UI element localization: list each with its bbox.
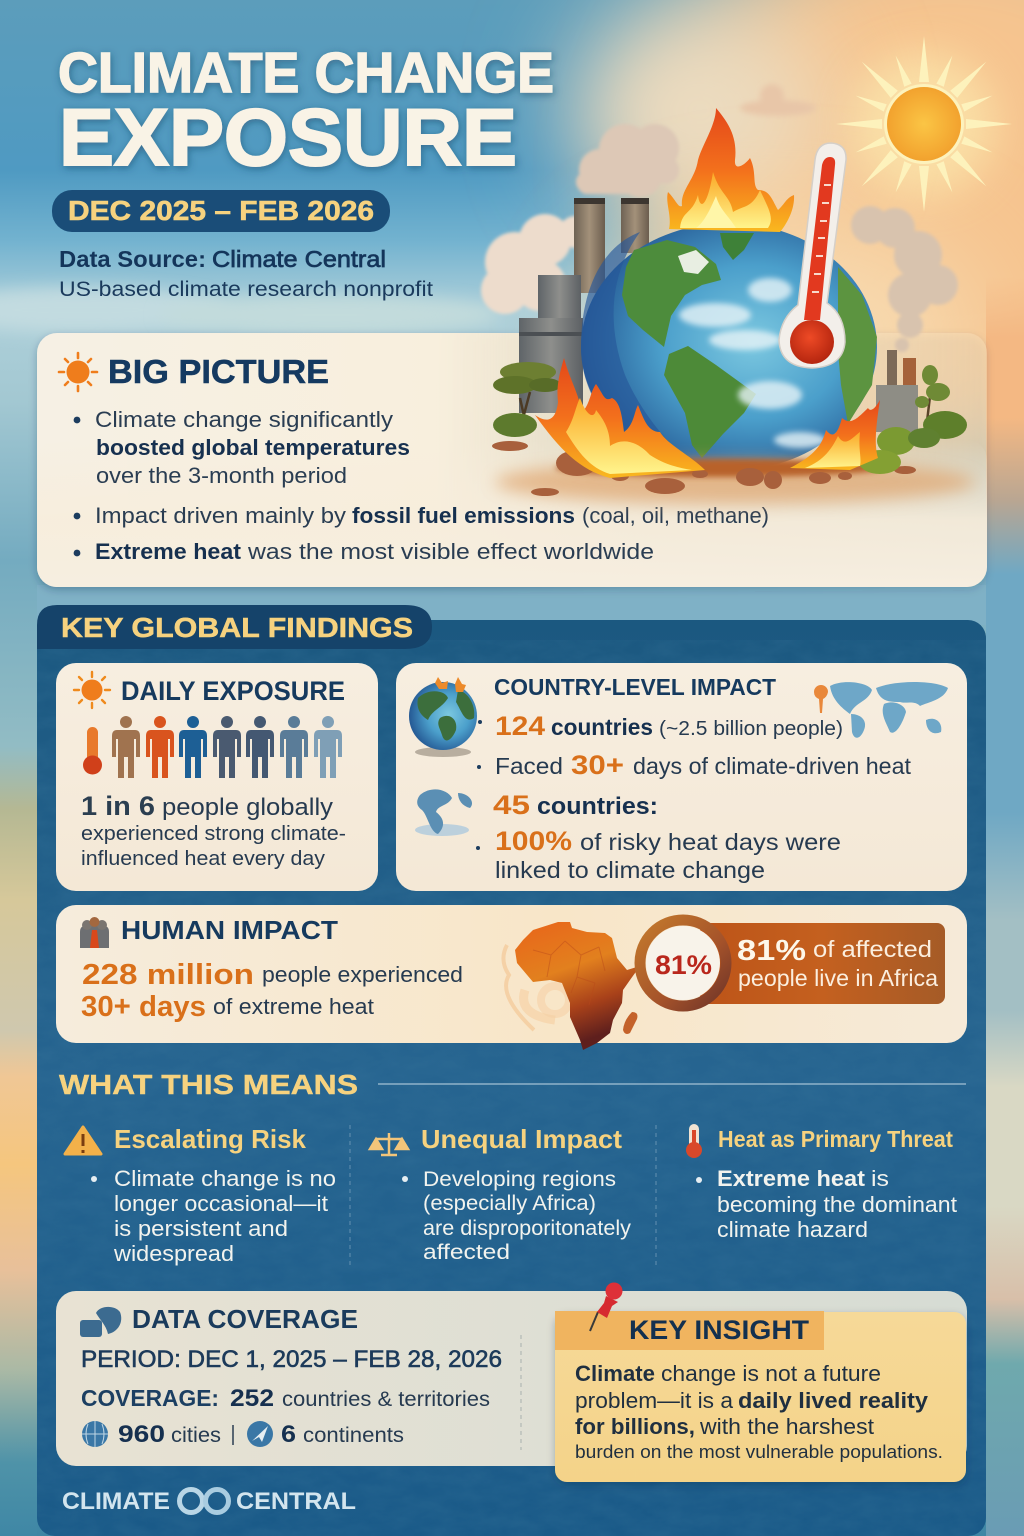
heading: WHAT THIS MEANS xyxy=(59,1069,358,1100)
column: unequal impact: are disproporitonately xyxy=(423,1216,631,1240)
column: escalating risk xyxy=(65,1124,336,1266)
distant cloud xyxy=(740,84,816,116)
column: heat as primary threat: becoming the dominant xyxy=(717,1192,957,1217)
section: what this means xyxy=(59,1069,966,1266)
insight text: change is not a future xyxy=(661,1361,881,1386)
stat: 30+ days: 30+ xyxy=(571,750,624,780)
stat: 124 countries: (~2.5 billion people) xyxy=(659,718,843,740)
callout: 81 percent: 81% xyxy=(737,935,806,967)
heading: DAILY EXPOSURE xyxy=(121,676,345,706)
callout: 81 percent xyxy=(640,920,945,1006)
cities and continents xyxy=(82,1421,404,1448)
heading: COUNTRY-LEVEL IMPACT xyxy=(494,674,776,700)
callout: 81 percent: of affected xyxy=(813,936,932,962)
cities and continents: 960 xyxy=(118,1421,165,1448)
stat: 228 million xyxy=(81,959,463,1023)
map: Africa xyxy=(515,922,640,1050)
column: heat as primary threat xyxy=(686,1124,957,1242)
column: unequal impact: Developing regions xyxy=(423,1167,616,1191)
stat text xyxy=(81,791,346,870)
title xyxy=(58,41,554,183)
stat: 45 countries xyxy=(493,790,658,820)
panel: big picture xyxy=(37,333,987,587)
stat: 30+ days xyxy=(477,750,912,780)
icon: globe and case xyxy=(80,1307,121,1337)
column: escalating risk: Escalating Risk xyxy=(114,1124,307,1154)
card: daily exposure xyxy=(56,663,378,891)
icon: sun xyxy=(59,353,97,391)
column: escalating risk: longer occasional—it xyxy=(114,1191,328,1216)
column: unequal impact xyxy=(370,1124,631,1264)
smoke clouds xyxy=(481,124,958,352)
cities and continents: cities xyxy=(171,1424,221,1447)
insight text: with the harshest xyxy=(699,1414,874,1439)
stat text: experienced strong climate- xyxy=(81,823,346,845)
big picture bullets: Climate change significantly xyxy=(95,407,394,432)
top flames xyxy=(667,108,794,232)
ground xyxy=(492,441,975,504)
stat: 45 countries: countries: xyxy=(537,793,658,820)
card: human impact xyxy=(56,905,967,1050)
heading: big picture: BIG PICTURE xyxy=(108,353,329,390)
stat: 228 million: 30+ days xyxy=(81,991,206,1023)
factory right xyxy=(876,350,918,432)
bottom fires xyxy=(535,358,880,478)
title: EXPOSURE xyxy=(59,93,517,183)
footer logo: CENTRAL xyxy=(236,1488,356,1515)
callout: 81 percent: people live in Africa xyxy=(738,965,938,991)
stat: 100 percent: 100% xyxy=(495,826,572,856)
insight text: problem—it is a xyxy=(575,1388,734,1413)
factory left xyxy=(519,198,649,413)
data source: Climate Central xyxy=(212,246,386,272)
heat swirl xyxy=(503,945,569,1030)
callout: key insight xyxy=(555,1282,966,1482)
insight text xyxy=(575,1361,943,1462)
icon: globe xyxy=(409,677,477,757)
Greenland xyxy=(720,233,754,260)
data source: US-based climate research nonprofit xyxy=(59,278,433,301)
icon: small world xyxy=(415,789,472,836)
icon: sun xyxy=(74,672,110,708)
icon: world map xyxy=(814,682,948,738)
insight text: Climate xyxy=(575,1361,655,1386)
column: unequal impact: affected xyxy=(423,1240,510,1264)
column: heat as primary threat: Extreme heat xyxy=(717,1166,866,1191)
panel: key global findings xyxy=(37,605,986,1536)
tab xyxy=(555,1311,824,1350)
big picture bullets: fossil fuel emissions xyxy=(352,503,575,528)
icon: crowd xyxy=(80,917,109,948)
column: unequal impact: (especially Africa) xyxy=(423,1191,596,1215)
thermometer xyxy=(779,143,846,368)
coverage xyxy=(81,1385,490,1412)
card: country-level impact xyxy=(396,663,967,891)
column: heat as primary threat: Heat as Primary Threat xyxy=(718,1126,953,1152)
big picture bullets: Impact driven mainly by xyxy=(95,503,347,528)
people row xyxy=(112,716,342,778)
stat text: people globally xyxy=(162,794,333,821)
big picture bullets: (coal, oil, methane) xyxy=(582,503,769,528)
footer logo: CLIMATE xyxy=(62,1488,170,1515)
stat: 100 percent xyxy=(476,826,841,883)
column: escalating risk: widespread xyxy=(113,1241,234,1266)
cities and continents: 6 xyxy=(281,1421,296,1448)
insight text: daily lived reality xyxy=(738,1388,929,1413)
period: PERIOD: DEC 1, 2025 – FEB 28, 2026 xyxy=(81,1346,502,1373)
North America xyxy=(622,240,721,347)
stat: 45 countries: 45 xyxy=(493,790,530,820)
stat: 30+ days: Faced xyxy=(495,753,563,779)
column: heat as primary threat: is xyxy=(871,1166,889,1191)
stat: 100 percent: linked to climate change xyxy=(495,857,765,883)
tab: KEY INSIGHT xyxy=(629,1315,810,1345)
column: escalating risk: is persistent and xyxy=(114,1216,288,1241)
title: CLIMATE CHANGE xyxy=(58,41,554,105)
stat: 100 percent: of risky heat days were xyxy=(580,829,841,855)
footer logo xyxy=(62,1488,356,1515)
column: unequal impact: Unequal Impact xyxy=(421,1124,622,1154)
big picture bullets: Extreme heat xyxy=(95,539,242,564)
South America xyxy=(664,346,756,458)
cloud swirl xyxy=(679,278,826,448)
stat: 30+ days: days of climate-driven heat xyxy=(633,753,912,779)
big picture bullets: boosted global temperatures xyxy=(96,435,410,460)
trees and bushes xyxy=(493,362,967,474)
card: data coverage xyxy=(56,1291,967,1466)
globe xyxy=(581,223,877,471)
stat: 124 countries xyxy=(478,711,843,741)
big picture bullets: was the most visible effect worldwide xyxy=(247,539,654,564)
big picture bullets: over the 3-month period xyxy=(96,463,347,488)
stat: 124 countries: 124 xyxy=(495,711,545,741)
column: heat as primary threat: climate hazard xyxy=(717,1217,868,1242)
stat: 228 million: 228 million xyxy=(82,959,254,991)
stat text: 1 in 6 xyxy=(81,791,155,821)
icon: thermometer xyxy=(83,727,102,774)
heading tab xyxy=(37,605,432,649)
cities and continents: continents xyxy=(303,1424,404,1447)
stat: 124 countries: countries xyxy=(551,714,653,740)
stat: 228 million: of extreme heat xyxy=(213,994,374,1019)
illustration: burning earth xyxy=(481,36,1012,504)
data source: Data Source: xyxy=(59,246,206,272)
coverage: countries & territories xyxy=(282,1388,490,1411)
date pill xyxy=(52,190,390,232)
coverage: COVERAGE: xyxy=(81,1385,219,1411)
big picture bullets xyxy=(74,407,769,564)
icon: sun with rays xyxy=(836,36,1012,212)
data source xyxy=(59,246,433,301)
coverage: 252 xyxy=(230,1385,274,1412)
Europe and Africa side xyxy=(838,267,877,424)
heading: HUMAN IMPACT xyxy=(121,915,338,945)
heading: DATA COVERAGE xyxy=(132,1304,358,1334)
icon: push pin xyxy=(590,1282,622,1331)
insight text: for billions, xyxy=(575,1414,695,1439)
heading tab: KEY GLOBAL FINDINGS xyxy=(61,612,413,643)
callout: 81 percent: 81% xyxy=(655,950,712,980)
stat text: influenced heat every day xyxy=(81,848,325,870)
column: escalating risk: Climate change is no xyxy=(114,1166,336,1191)
date pill: DEC 2025 – FEB 2026 xyxy=(68,195,374,226)
stat: 228 million: people experienced xyxy=(262,962,463,987)
insight text: burden on the most vulnerable populations. xyxy=(575,1442,943,1462)
